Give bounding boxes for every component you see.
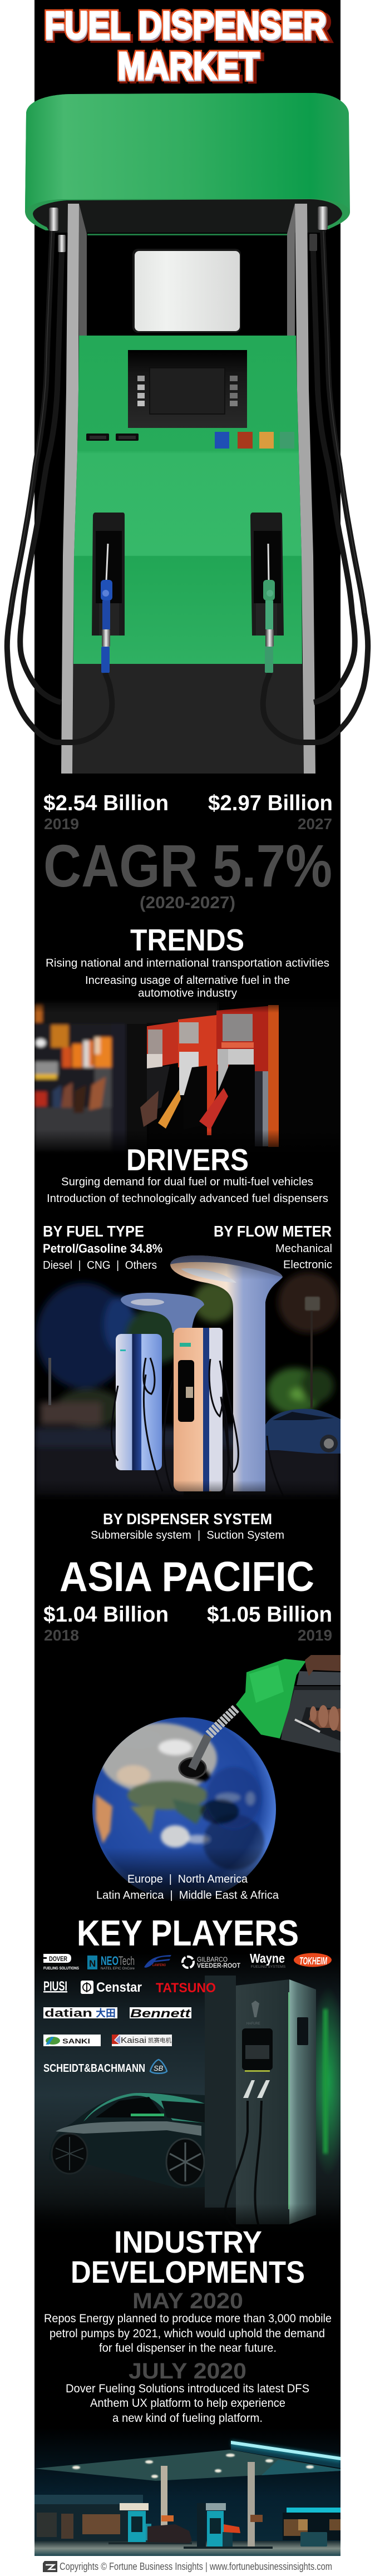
logo: Wayne: Wayne [250, 1951, 285, 1966]
photo: car and charger [34, 1966, 341, 2224]
CAGR: (2020-2027) [140, 893, 235, 912]
blue nozzle holster [92, 513, 125, 673]
market size 2019 [43, 791, 169, 833]
right inner post side [287, 204, 295, 336]
logo: Gilbarco Veeder-Root [182, 1956, 241, 1969]
logo: Datian: 大田 [96, 2008, 116, 2019]
development July 2020: a new kind of fueling platform. [112, 2412, 263, 2425]
logo: Scheidt and Bachmann: SCHEIDT&BACHMANN [43, 2062, 145, 2075]
logo: Censtar [81, 1980, 142, 1995]
by flow meter: Electronic [283, 1259, 332, 1271]
by flow meter: Mechanical [275, 1243, 332, 1255]
other regions [96, 1873, 279, 1902]
colour buttons [215, 432, 294, 449]
logo: Sanki [43, 2035, 101, 2046]
logo: Lanfeng [144, 1955, 171, 1968]
market size 2027 [208, 791, 333, 833]
parked cars [147, 2524, 327, 2547]
region value 2019: $1.05 Billion [207, 1603, 332, 1627]
by fuel type: BY FUEL TYPE [43, 1223, 144, 1240]
blue car [265, 1409, 341, 1454]
industry developments heading: INDUSTRY [114, 2224, 262, 2259]
development May 2020: for fuel dispenser in the near future. [99, 2342, 277, 2355]
logo: Tatsuno: TATSUNO [156, 1981, 216, 1996]
display screen [132, 249, 241, 333]
logo: NEOTech: N [89, 1958, 96, 1969]
industry developments heading [71, 2224, 305, 2289]
title: MARKET [119, 46, 263, 90]
drivers heading: DRIVERS [126, 1142, 249, 1177]
title [45, 3, 331, 90]
charger [205, 1976, 316, 2232]
canopy [25, 93, 350, 235]
region value 2018: 2018 [44, 1627, 79, 1644]
photo fade [234, 2205, 316, 2233]
development May 2020: petrol pumps by 2021, which would uphold the demand [50, 2327, 325, 2340]
right post [295, 204, 315, 774]
by dispenser system: BY DISPENSER SYSTEM [103, 1510, 272, 1528]
drivers text [47, 1176, 328, 1205]
logo: Datian: datian [45, 2007, 92, 2020]
by fuel type [43, 1223, 162, 1272]
CAGR: CAGR 5.7% [43, 832, 332, 899]
logo: Sanki: SANKI [62, 2037, 90, 2045]
logo: Tokheim [294, 1953, 332, 1967]
green glow [316, 1993, 341, 2169]
region value 2018: $1.04 Billion [43, 1603, 169, 1627]
logo: Tokheim: TOKHEIM [299, 1956, 328, 1967]
hose ferrules [49, 206, 328, 252]
title: FUEL DISPENSER [45, 4, 327, 48]
hoses left [7, 231, 112, 742]
other regions: Europe | North America [127, 1873, 248, 1885]
title: MARKET [117, 44, 259, 87]
development July 2020: Anthem UX platform to help experience [90, 2397, 285, 2410]
night background [34, 1272, 341, 1497]
trends text: Increasing usage of alternative fuel in the [85, 974, 290, 987]
market size 2019: $2.54 Billion [43, 791, 169, 815]
region value 2019: 2019 [298, 1627, 332, 1644]
development May 2020: Repos Energy planned to produce more than 3,000 mobile [44, 2312, 332, 2325]
development July 2020: JULY 2020 [129, 2359, 246, 2383]
key players heading: KEY PLAYERS [77, 1913, 299, 1953]
pillars [161, 2462, 263, 2547]
logo: NEOTech: NEO [101, 1954, 119, 1968]
logo: NEOTech [87, 1954, 135, 1971]
logo: NEOTech: NATEL EPIC OnCore [101, 1967, 135, 1971]
trends heading: TRENDS [130, 923, 244, 957]
logo: Piusi [43, 1979, 67, 1994]
by fuel type: Diesel | CNG | Others [43, 1259, 157, 1272]
by flow meter [214, 1223, 332, 1271]
logos: key players [43, 1951, 332, 2075]
logo: Wayne: FUELING SYSTEMS [251, 1966, 285, 1969]
footer logo [43, 2561, 57, 2572]
logo: Censtar: Censtar [96, 1980, 142, 1995]
development July 2020: Dover Fueling Solutions introduced its latest DFS [66, 2382, 309, 2395]
title: FUEL DISPENSER [45, 3, 327, 47]
market size 2027: 2027 [298, 815, 332, 833]
trends text [46, 957, 329, 999]
fuel dispenser illustration [7, 93, 368, 774]
trends text: automotive industry [138, 987, 237, 999]
photo: EV style dispensers at night [34, 1247, 341, 1508]
by fuel type: Petrol/Gasoline 34.8% [43, 1242, 162, 1255]
photo fade [34, 1001, 279, 1154]
industry developments heading: DEVELOPMENTS [71, 2254, 305, 2289]
photo fade [34, 1247, 341, 1508]
fuel nozzle and hand [179, 1655, 341, 1778]
ground [34, 2541, 341, 2556]
pump left [108, 2503, 192, 2544]
development May 2020 [44, 2289, 332, 2355]
logo: Kaisai: 凯赛电机 [148, 2037, 171, 2044]
car [49, 2092, 205, 2188]
hoses right [263, 231, 368, 742]
pump right [184, 2503, 273, 2549]
street lamp [48, 1297, 320, 1408]
dark lower cabinet [72, 664, 304, 774]
logo: Kaisai: Kaisai [121, 2036, 146, 2045]
logo: Dover: FUELING SOLUTIONS [43, 1967, 79, 1971]
title: MARKET [118, 45, 260, 88]
region heading: ASIA PACIFIC [60, 1553, 314, 1600]
market size 2019: 2019 [44, 815, 79, 833]
logo: Lanfeng: LANFENG [152, 1964, 166, 1967]
region value 2018 [43, 1603, 169, 1644]
logo: Gilbarco Veeder-Root: GILBARCO [197, 1956, 228, 1963]
pump 2 [158, 1015, 216, 1135]
by flow meter: BY FLOW METER [214, 1223, 332, 1240]
canopy [34, 2440, 341, 2481]
photo: fuel pumps row [34, 1002, 279, 1151]
front dispenser [164, 1328, 284, 1497]
by dispenser system [91, 1510, 284, 1541]
logo: NEOTech: Tech [119, 1954, 135, 1968]
footer [43, 2561, 332, 2572]
logo: Dover: DOVER [49, 1955, 67, 1963]
card slots [86, 434, 139, 441]
logo: Piusi: PIUSI [43, 1979, 67, 1994]
left post [61, 204, 79, 774]
pump 1 [140, 1022, 178, 1127]
logo: Gilbarco Veeder-Root: VEEDER-ROOT [197, 1962, 241, 1969]
globe illustration [89, 1717, 281, 1903]
development July 2020 [66, 2359, 309, 2425]
pump 3 [199, 1005, 279, 1147]
by dispenser system: Submersible system | Suction System [91, 1529, 284, 1541]
photo: gas station at night [34, 2427, 341, 2556]
title: MARKET [117, 44, 259, 87]
development May 2020: MAY 2020 [132, 2289, 243, 2313]
back dispenser [111, 1334, 162, 1491]
tall lamp [170, 1255, 283, 1491]
trends text: Rising national and international transportation activities [46, 957, 329, 969]
logo: Scheidt and Bachmann: SB [154, 2064, 164, 2072]
drivers text: Surging demand for dual fuel or multi-fuel vehicles [61, 1176, 313, 1188]
market size 2027: $2.97 Billion [208, 791, 333, 815]
logo: Datian [43, 2007, 117, 2020]
drivers text: Introduction of technologically advanced fuel dispensers [47, 1193, 328, 1205]
payment terminal [128, 350, 247, 428]
logo: Kaisai [112, 2035, 172, 2046]
building [34, 2495, 341, 2542]
title: FUEL DISPENSER [46, 6, 331, 49]
logo: Dover [43, 1954, 79, 1971]
charger: HAFURE [246, 2022, 260, 2026]
left inner post side [79, 204, 87, 336]
small lamp [121, 1293, 204, 1333]
other regions: Latin America | Middle East & Africa [96, 1889, 279, 1902]
logo: Bennett: Bennett [130, 2007, 191, 2020]
green nozzle holster [250, 513, 284, 673]
green body panel [73, 336, 302, 664]
region value 2019 [207, 1603, 332, 1644]
title: FUEL DISPENSER [45, 3, 327, 47]
